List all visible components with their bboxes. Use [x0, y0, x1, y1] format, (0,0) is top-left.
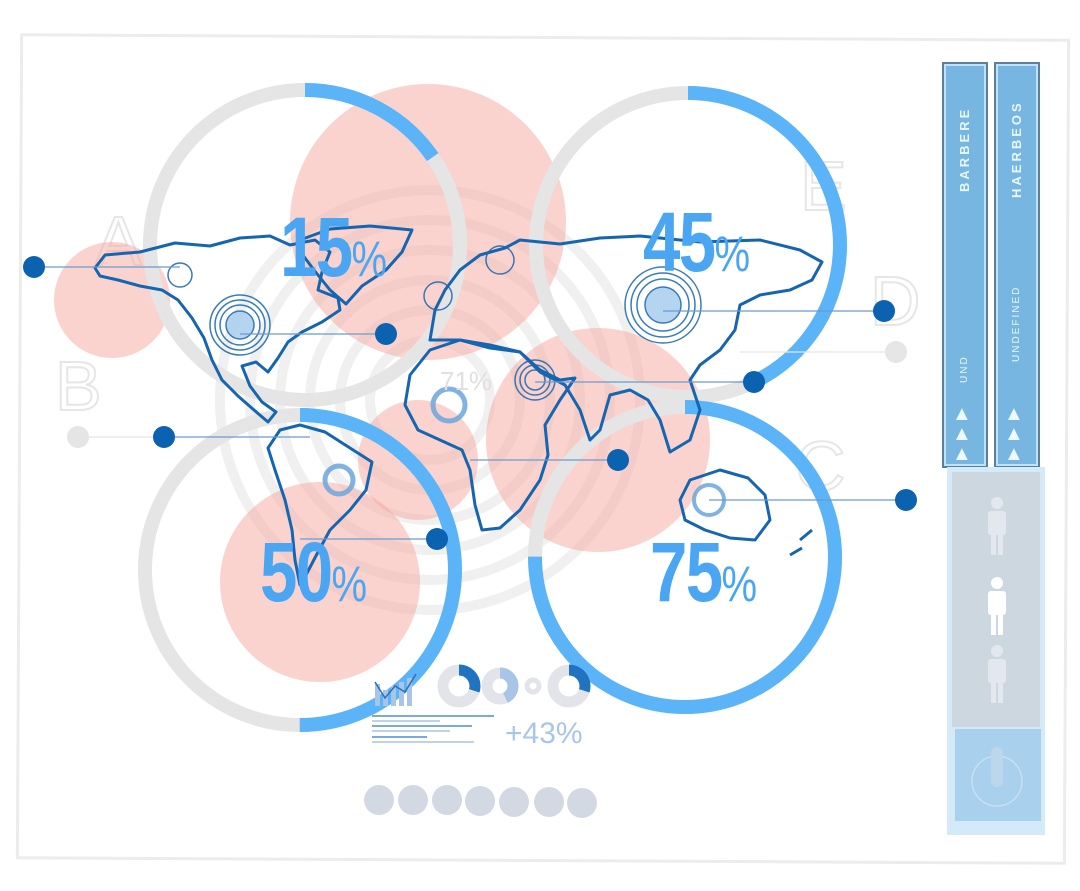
sidebar panel 1: ▲ [952, 423, 972, 445]
sidebar panel 2: ▲ [1004, 423, 1024, 445]
connector lines [34, 267, 906, 539]
sidebar panel 1 [942, 62, 988, 468]
main graphic: +43% [505, 717, 583, 750]
stat: 15%: 15% [280, 200, 386, 294]
faint letters: B [55, 347, 102, 425]
sidebar panel 2: UNDEFINED [1011, 286, 1022, 362]
faint letters: C [795, 427, 846, 505]
faint letters [55, 147, 921, 505]
sidebar panel 1: BARBERE [957, 106, 972, 192]
stat: 75%: 75% [650, 525, 756, 619]
bottom mini chart [375, 674, 416, 706]
mini target icons [168, 246, 724, 515]
faint letters: A [95, 202, 142, 280]
stat: 45%: 45% [643, 195, 749, 289]
ring: 45% [536, 93, 840, 397]
faint letters: E [800, 147, 847, 225]
stat: 50%: 50% [260, 525, 366, 619]
sidebar panel 2: ▲ [1004, 403, 1024, 425]
ring: 75% [535, 407, 835, 707]
sidebar panel 1: UND [959, 355, 970, 383]
sidebar panel 2 [994, 62, 1040, 468]
power button [955, 729, 1041, 821]
pink circles [54, 84, 710, 682]
person icons [988, 497, 1006, 555]
faint letters: D [870, 262, 921, 340]
dots [23, 256, 917, 550]
gray dots row [364, 785, 597, 818]
main graphic: 71% [440, 366, 492, 396]
sidebar lower panel [947, 467, 1045, 835]
ring: 15% [150, 90, 460, 400]
sidebar panel 2: ▲ [1004, 443, 1024, 465]
bottom mini donuts [443, 670, 585, 702]
sidebar panel 2: HAERBEOS [1009, 100, 1024, 198]
sidebar panel 1: ▲ [952, 443, 972, 465]
ring: 50% [145, 415, 455, 725]
concentric rings background [220, 190, 640, 610]
world map [95, 226, 822, 585]
sidebar panel 1: ▲ [952, 403, 972, 425]
